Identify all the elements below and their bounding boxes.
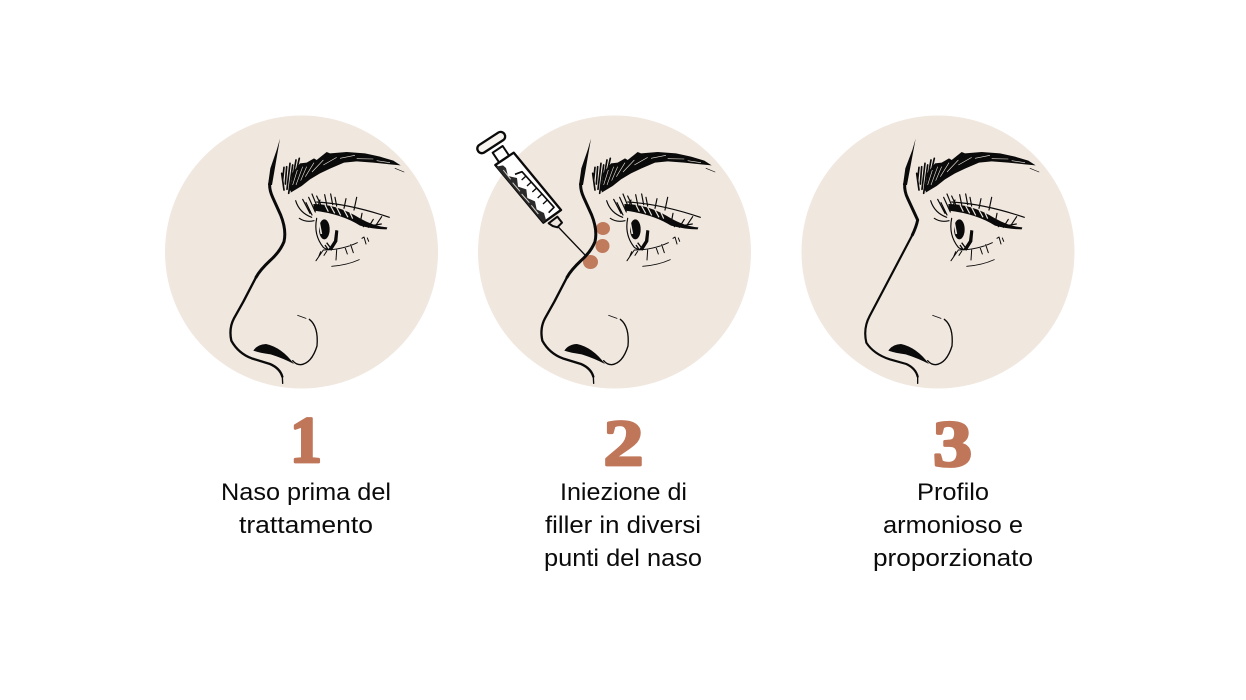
caption: step 3: armonioso e [883,512,1023,539]
caption: step 1: Naso prima del [221,479,391,506]
face: nose during treatment [541,139,715,383]
caption: step 3: proporzionato [873,545,1033,572]
caption: step 3 [873,479,1033,572]
circle background [802,116,1074,388]
face: harmonious profile [865,139,1039,383]
filler injection points [583,222,610,269]
circle background [478,116,751,388]
step number 3: 3 [933,408,972,481]
panel: step 1 circle illustration [165,116,438,388]
step number 1: 1 [290,404,322,477]
panel: step 3 circle illustration [802,116,1074,388]
caption: step 3: Profilo [917,479,989,506]
step number 2: 2 [604,407,644,480]
panel: step 2 circle illustration [476,116,751,388]
caption: step 2: filler in diversi [545,512,701,539]
caption: step 1: trattamento [239,512,373,539]
caption: step 2 [544,479,702,572]
face: nose before treatment [230,139,404,383]
caption: step 1 [221,479,391,539]
icon: syringe [476,130,586,256]
circle background [165,116,438,388]
caption: step 2: Iniezione di [560,479,687,506]
caption: step 2: punti del naso [544,545,702,572]
